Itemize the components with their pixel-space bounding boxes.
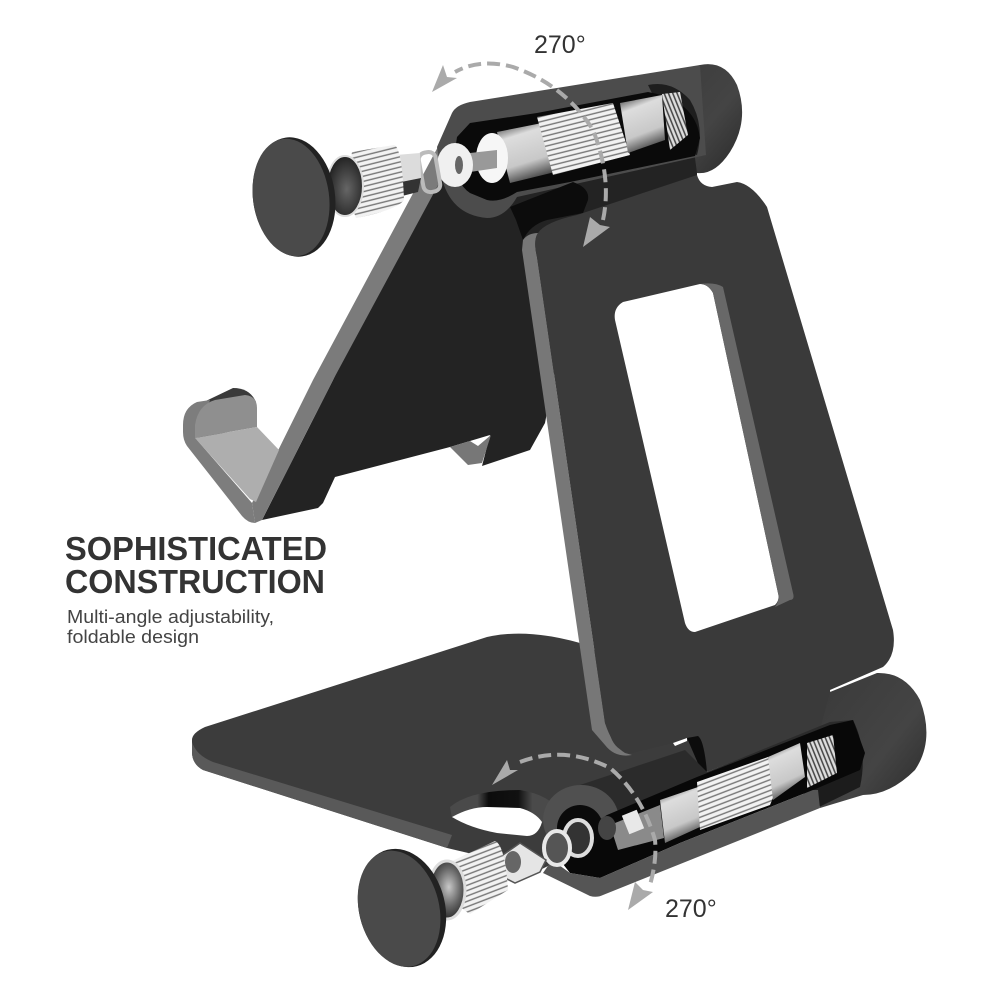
hinge end cap bbox=[820, 673, 926, 808]
right barrel bbox=[768, 743, 805, 800]
rotation arrow: top bbox=[432, 63, 610, 247]
panel face bbox=[535, 175, 894, 772]
label: 270 degrees top: 270° bbox=[534, 31, 586, 59]
hook back face bbox=[195, 395, 257, 438]
hole bbox=[452, 807, 542, 836]
magnetic disc bbox=[346, 839, 458, 977]
magnetic disc bbox=[245, 132, 343, 262]
bottom hinge assembly bbox=[543, 673, 926, 897]
window inner wall bbox=[700, 283, 794, 607]
washer front bbox=[544, 831, 570, 865]
barrel end face bbox=[476, 133, 508, 183]
washer rear bbox=[564, 820, 592, 856]
hinge housing bbox=[437, 65, 706, 218]
knurled nut bbox=[349, 145, 404, 218]
right barrel bbox=[620, 95, 665, 153]
pin shaft bbox=[470, 150, 497, 172]
spring washer bbox=[418, 151, 441, 193]
hinge interior bbox=[455, 92, 700, 201]
hinge interior bbox=[552, 720, 865, 878]
description: Multi-angle adjustability, bbox=[67, 606, 274, 627]
hinge end cap bbox=[648, 64, 742, 173]
front tilt panel bbox=[522, 175, 894, 772]
panel side edge bbox=[252, 143, 457, 523]
pin head bbox=[437, 143, 473, 187]
groove below hinge bbox=[510, 182, 588, 240]
smooth barrel bbox=[497, 122, 555, 183]
panel window bbox=[615, 284, 779, 632]
base plate bbox=[192, 634, 700, 870]
rear support panel bbox=[252, 143, 697, 523]
panel notch bbox=[450, 435, 491, 465]
heading bbox=[65, 530, 327, 600]
hinge ring bbox=[543, 785, 619, 855]
smooth barrel bbox=[660, 787, 700, 843]
cap inner ring bbox=[648, 84, 700, 155]
cap inner ring bbox=[800, 720, 863, 808]
phone hook bbox=[183, 388, 279, 523]
pin shaft bbox=[610, 805, 664, 850]
neck bbox=[327, 156, 363, 216]
bottom slit highlight bbox=[673, 738, 687, 746]
label: 270 degrees bottom: 270° bbox=[665, 895, 717, 923]
knurled sleeve bbox=[537, 103, 630, 175]
top hinge assembly bbox=[437, 64, 742, 240]
right knurl bbox=[662, 92, 688, 150]
right knurl bbox=[807, 735, 837, 788]
heading: SOPHISTICATED bbox=[65, 530, 327, 567]
knurled sleeve bbox=[697, 757, 775, 830]
hole rim bbox=[450, 790, 560, 824]
hex nut bbox=[396, 153, 421, 183]
description: foldable design bbox=[67, 626, 199, 647]
upper housing bbox=[543, 720, 853, 825]
description bbox=[67, 606, 274, 647]
top knob bbox=[245, 132, 441, 262]
black slit bbox=[687, 736, 707, 772]
rotation arrow: bottom bbox=[492, 755, 655, 910]
heading: CONSTRUCTION bbox=[65, 563, 325, 600]
bottom knob bbox=[346, 816, 616, 977]
hook floor bbox=[195, 427, 279, 502]
neck bbox=[429, 861, 465, 919]
plate front edge bbox=[192, 742, 452, 848]
knurled nut bbox=[449, 841, 508, 914]
panel side edge bbox=[522, 233, 632, 756]
hex nut bbox=[500, 843, 546, 883]
lower lip bbox=[543, 790, 820, 897]
inner nut bbox=[598, 816, 616, 840]
